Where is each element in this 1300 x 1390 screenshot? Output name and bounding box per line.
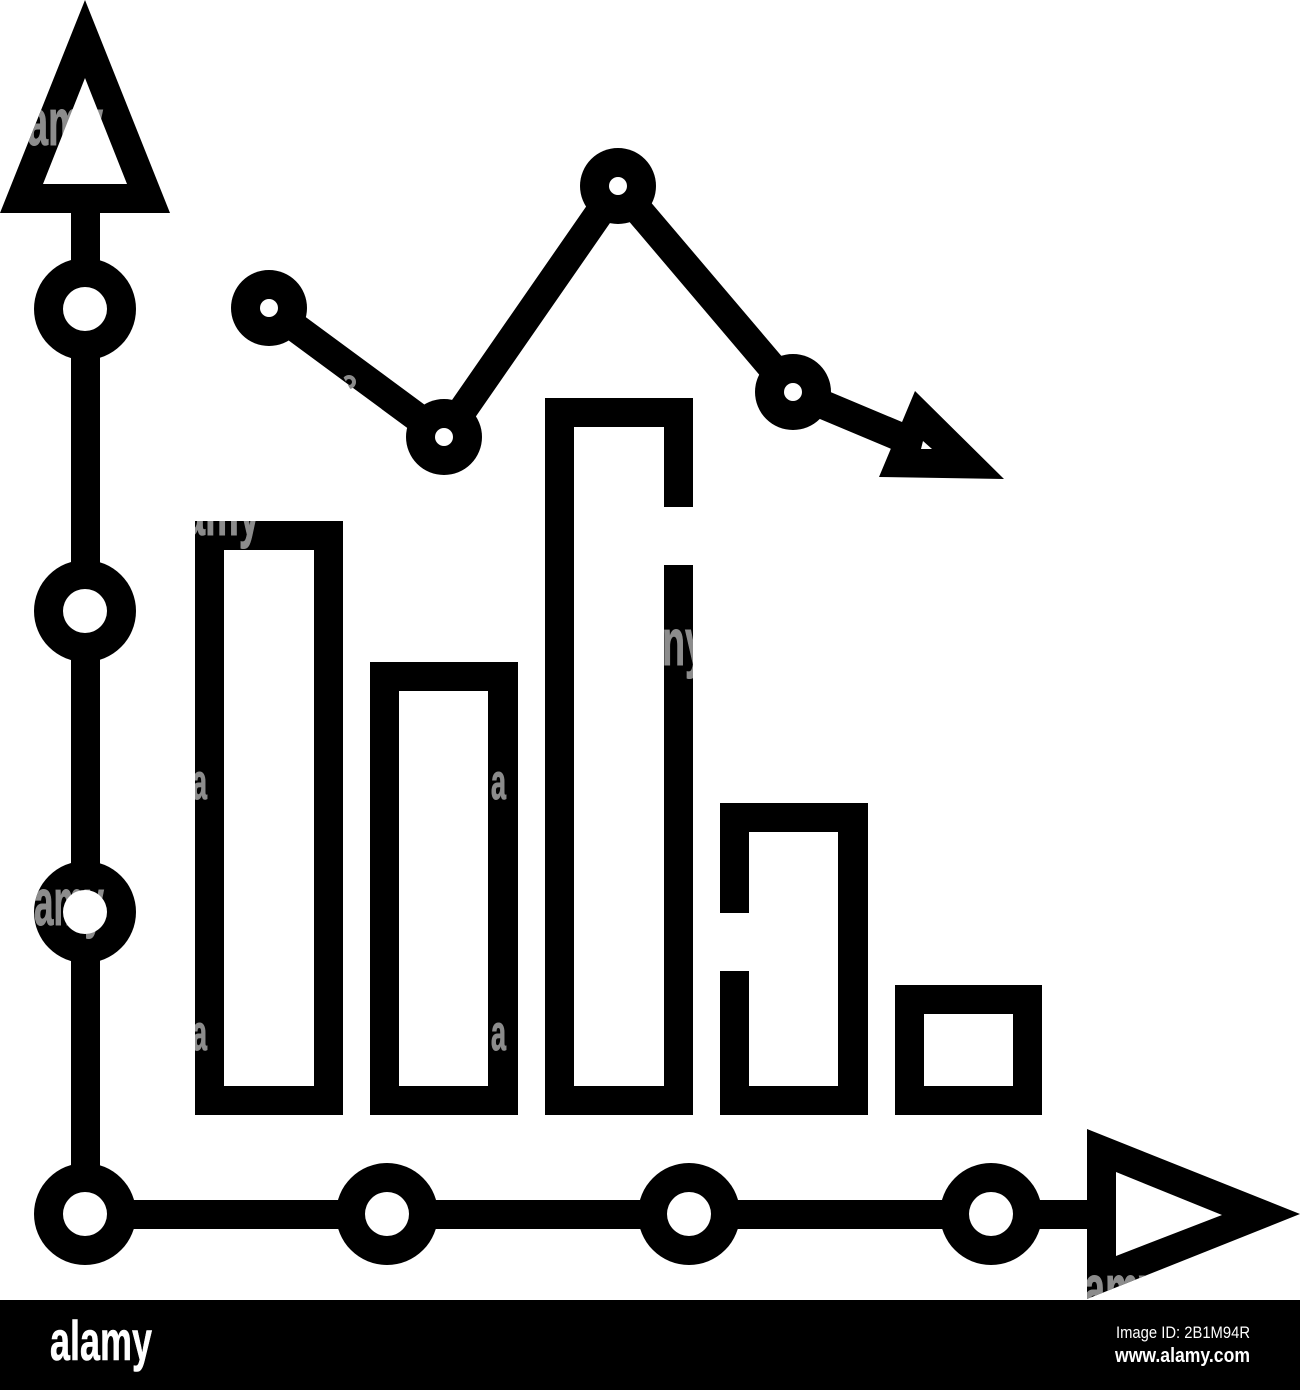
watermark fragment on trend line (344, 377, 354, 387)
horizontal axis marker 2 (638, 1163, 740, 1265)
origin marker (34, 1163, 136, 1265)
bar 1 (195, 521, 343, 1115)
trend line (269, 186, 905, 439)
marker centers (63, 287, 1013, 1236)
vertical axis marker 3 (34, 861, 136, 963)
watermark fragment on bar 3 side: ny (662, 605, 706, 679)
data point centers (260, 177, 802, 446)
bar 5 (895, 985, 1042, 1115)
watermark fragment on upward arrow: amy (27, 85, 103, 159)
horizontal axis marker 1 (336, 1163, 438, 1265)
image id: Image ID: 2B1M94R (1116, 1323, 1250, 1342)
watermark fragment on bar 2 lower side: a (491, 1005, 507, 1061)
watermark fragment on bar 1 side: a (192, 754, 208, 810)
horizontal axis marker 3 (940, 1163, 1042, 1265)
data point 4 (755, 354, 831, 430)
bar chart (184, 398, 1042, 1115)
horizontal axis line (85, 1200, 1095, 1229)
vertical axis line (71, 200, 100, 1214)
line chart with downward trend arrow (231, 148, 1004, 479)
rightward arrow opening (1116, 1172, 1222, 1256)
data point 3 (580, 148, 656, 224)
bar 2 (370, 662, 518, 1115)
bar 4 with gap on left side (720, 803, 868, 1115)
upward arrow opening (43, 78, 127, 184)
bar 3 with gap on right side (545, 398, 693, 1115)
data point 1 (231, 270, 307, 346)
data point 2 (406, 399, 482, 475)
watermark fragment on rightward arrow: amy (1084, 1251, 1160, 1325)
watermark fragment on vertical axis marker 3: amy (34, 865, 104, 939)
vertical axis marker 2 (34, 560, 136, 662)
icon: trend arrowhead (879, 391, 1004, 479)
icon: upward axis arrow (0, 0, 170, 213)
footer band (0, 1300, 1300, 1390)
watermark fragment on bar 1 top: amy (184, 475, 260, 549)
vertical axis marker 1 (34, 258, 136, 360)
icon: rightward axis arrow (1087, 1129, 1300, 1299)
watermark fragment on bar 1 lower side: a (192, 1005, 208, 1061)
website: www.alamy.com (1114, 1345, 1250, 1367)
watermark fragment on bar 2 side: a (491, 754, 507, 810)
footer logo: alamy (50, 1309, 152, 1372)
